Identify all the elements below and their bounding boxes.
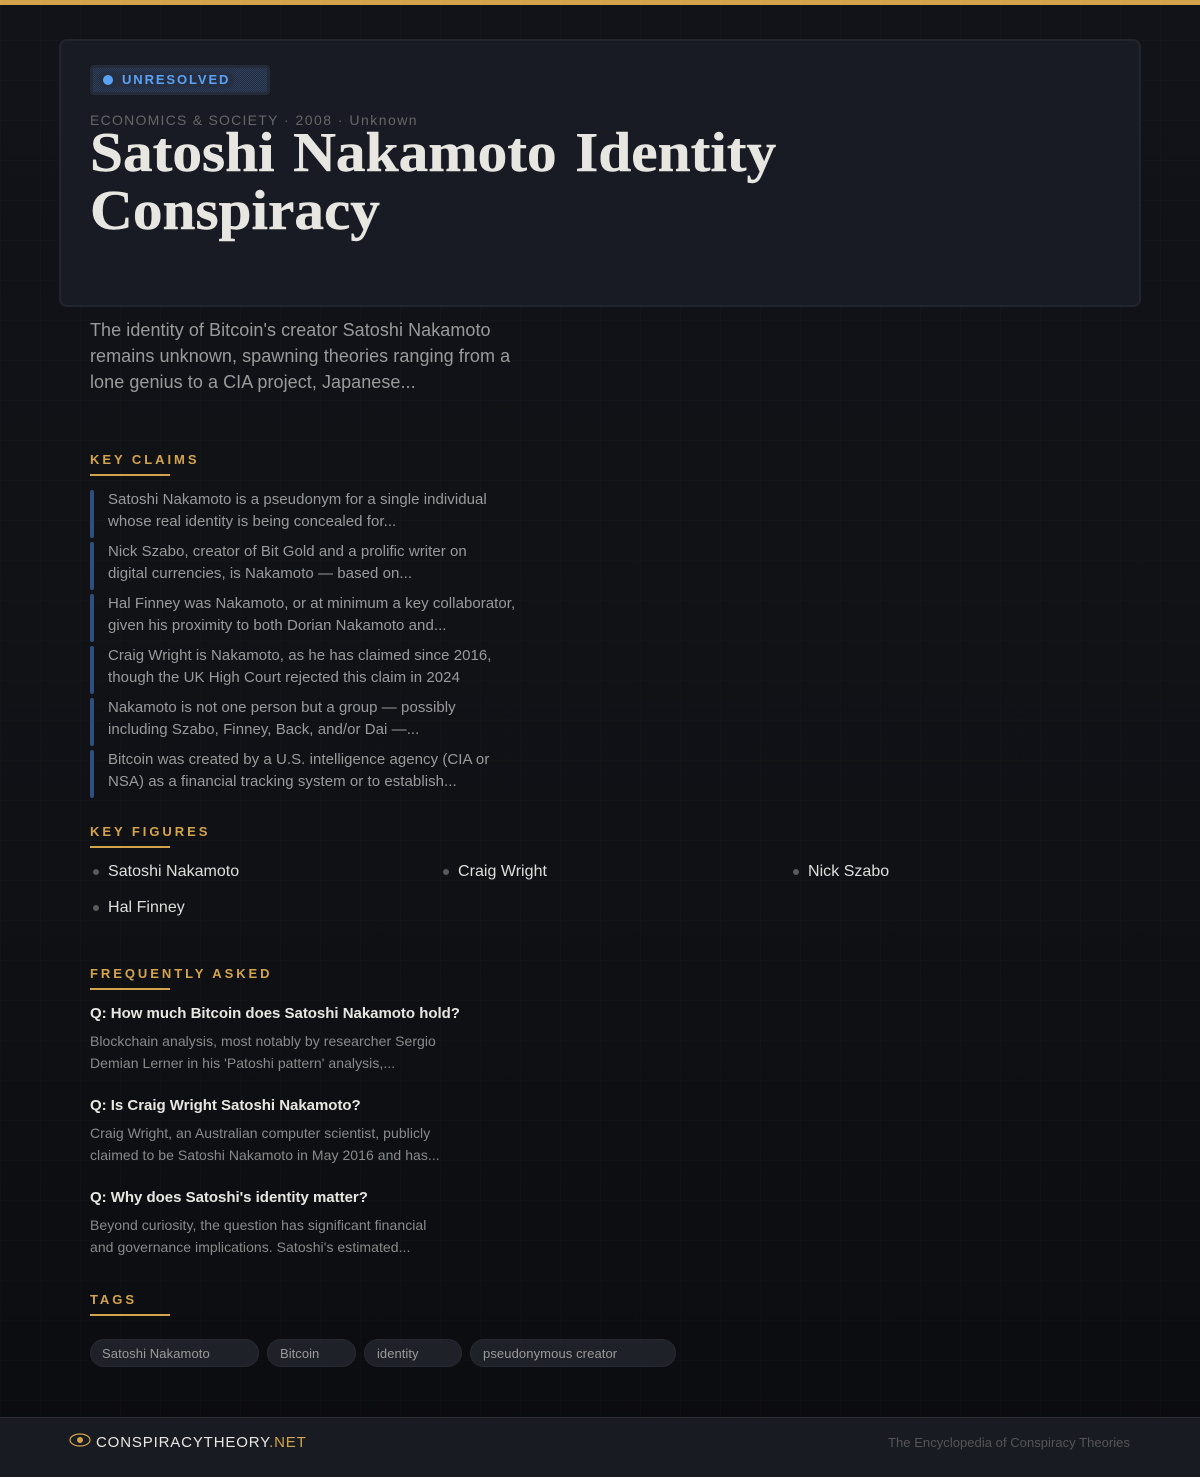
claim 2 <box>90 542 467 590</box>
tag: Satoshi Nakamoto: Satoshi Nakamoto <box>102 1346 210 1361</box>
claim 5 <box>90 698 456 746</box>
claim 6 <box>90 750 490 798</box>
top accent bar <box>0 0 1200 5</box>
tagline: The Encyclopedia of Conspiracy Theories <box>888 1435 1130 1450</box>
brand name: CONSPIRACYTHEORY.NET <box>96 1434 307 1451</box>
summary text <box>90 320 510 392</box>
claim 3: Hal Finney was Nakamoto, or at minimum a key collaborator, <box>108 595 515 612</box>
figure: Satoshi Nakamoto: Satoshi Nakamoto <box>108 863 239 880</box>
claim 4: Craig Wright is Nakamoto, as he has claimed since 2016, <box>108 647 491 664</box>
claim 1: Satoshi Nakamoto is a pseudonym for a single individual <box>108 491 487 508</box>
faq 1: Blockchain analysis, most notably by researcher Sergio <box>90 1033 436 1049</box>
claim 2: Nick Szabo, creator of Bit Gold and a prolific writer on <box>108 543 467 560</box>
faq 1: Q: How much Bitcoin does Satoshi Nakamoto hold? <box>90 1005 460 1022</box>
title: Satoshi Nakamoto Identity <box>90 122 776 184</box>
tag: identity: identity <box>377 1346 419 1361</box>
claim 1: whose real identity is being concealed for... <box>108 513 396 530</box>
figure: Nick Szabo: Nick Szabo <box>808 863 889 880</box>
status badge: unresolved: UNRESOLVED <box>122 72 230 87</box>
faq 3: and governance implications. Satoshi's estimated... <box>90 1239 410 1255</box>
footer <box>0 1417 1200 1477</box>
summary text: lone genius to a CIA project, Japanese... <box>90 372 416 392</box>
summary text: remains unknown, spawning theories ranging from a <box>90 346 510 366</box>
figure: Craig Wright: Craig Wright <box>458 863 547 880</box>
faq 1: Demian Lerner in his 'Patoshi pattern' analysis,... <box>90 1055 395 1071</box>
summary text: The identity of Bitcoin's creator Satoshi Nakamoto <box>90 320 491 340</box>
claim 6: Bitcoin was created by a U.S. intelligence agency (CIA or <box>108 751 489 768</box>
icon: eye logo <box>69 1433 91 1447</box>
heading: tags: TAGS <box>90 1292 137 1307</box>
faq 2: claimed to be Satoshi Nakamoto in May 2016 and has... <box>90 1147 440 1163</box>
faq 3: Q: Why does Satoshi's identity matter? <box>90 1189 368 1206</box>
title <box>90 122 776 242</box>
tag: pseudonymous creator: pseudonymous creator <box>483 1346 617 1361</box>
tag: identity <box>364 1339 462 1367</box>
figure: Hal Finney: Hal Finney <box>108 899 185 916</box>
claim 4: though the UK High Court rejected this claim in 2024 <box>108 669 460 686</box>
claim 3 <box>90 594 515 642</box>
claim 4 <box>90 646 491 694</box>
faq 2: Q: Is Craig Wright Satoshi Nakamoto? <box>90 1097 361 1114</box>
tag: Satoshi Nakamoto <box>90 1339 259 1367</box>
claim 1 <box>90 490 487 538</box>
heading: frequently asked: FREQUENTLY ASKED <box>90 966 273 981</box>
title: Conspiracy <box>90 180 380 242</box>
faq 1 <box>90 1005 460 1071</box>
claim 5: including Szabo, Finney, Back, and/or Dai —... <box>108 721 419 738</box>
claim list <box>90 490 515 798</box>
heading: key claims: KEY CLAIMS <box>90 452 199 467</box>
tag: Bitcoin: Bitcoin <box>280 1346 319 1361</box>
tag: pseudonymous creator <box>470 1339 676 1367</box>
claim 5: Nakamoto is not one person but a group — possibly <box>108 699 456 716</box>
claim 2: digital currencies, is Nakamoto — based on... <box>108 565 412 582</box>
faq 2 <box>90 1097 440 1163</box>
heading: key figures: KEY FIGURES <box>90 824 210 839</box>
claim 3: given his proximity to both Dorian Nakamoto and... <box>108 617 446 634</box>
faq 3: Beyond curiosity, the question has significant financial <box>90 1217 426 1233</box>
tag: Bitcoin <box>267 1339 356 1367</box>
category meta line: ECONOMICS & SOCIETY · 2008 · Unknown <box>90 112 418 128</box>
status badge: unresolved <box>90 65 270 95</box>
claim 6: NSA) as a financial tracking system or to establish... <box>108 773 457 790</box>
faq 2: Craig Wright, an Australian computer scientist, publicly <box>90 1125 430 1141</box>
panel: header card <box>59 39 1141 307</box>
faq 3 <box>90 1189 426 1255</box>
